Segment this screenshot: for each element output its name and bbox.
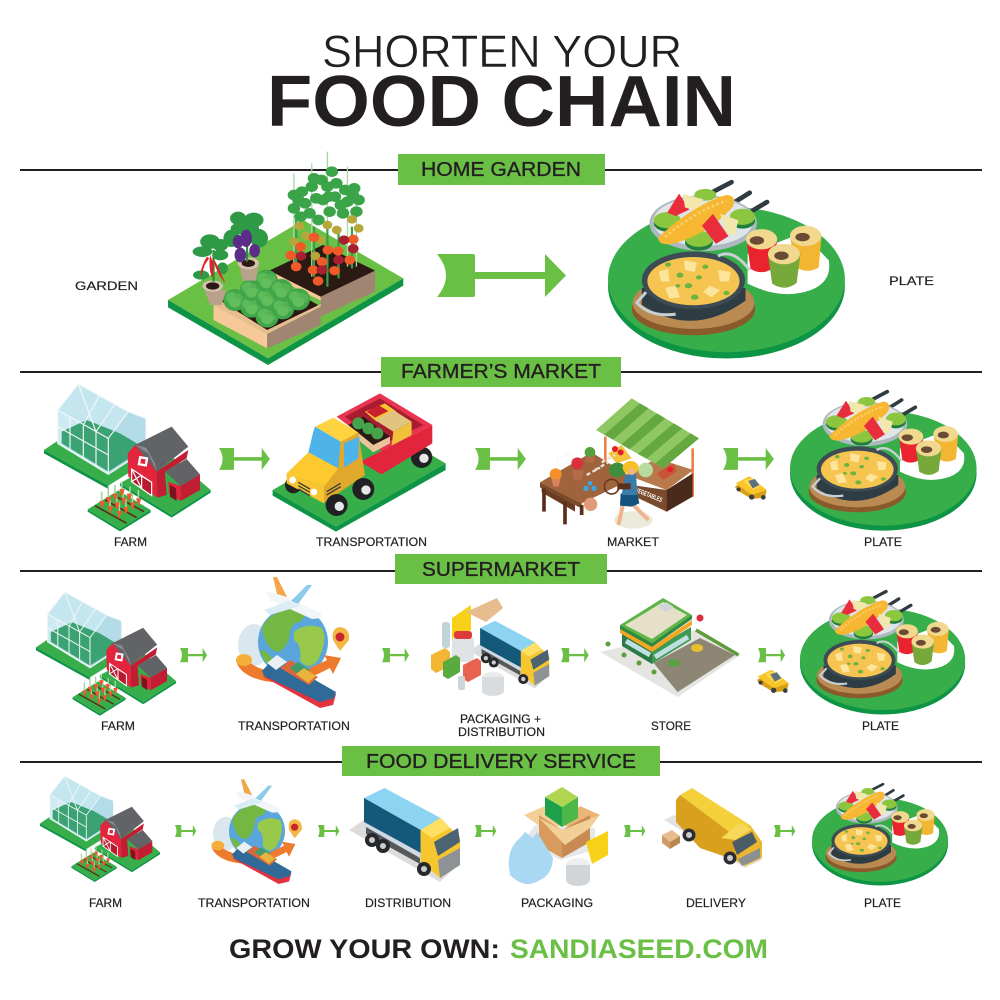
label: plate: PLATE [862,719,899,733]
icon: market stall [540,398,699,529]
icon: pickup truck [273,393,446,532]
icon: taxi [757,670,789,693]
panel: home garden [20,152,982,365]
label: farm: FARM [89,896,122,910]
icon: globe, plane and ship [211,779,302,884]
heading: food delivery service: FOOD DELIVERY SERVICE [366,751,636,773]
heading: farmer's market: FARMER’S MARKET [401,361,601,383]
icon: farm [36,592,176,716]
arrow [318,825,339,837]
title line 2: FOOD CHAIN [267,62,736,142]
label: distribution: DISTRIBUTION [365,896,451,910]
label: transportation: TRANSPORTATION [238,719,350,733]
icon: packaging [509,787,608,886]
arrow [180,648,207,662]
label: plate: PLATE [864,535,902,549]
label: transportation: TRANSPORTATION [198,896,310,910]
icon: distribution truck [349,788,461,882]
heading: supermarket: SUPERMARKET [422,559,580,581]
icon: garden beds [168,152,403,365]
arrow [219,448,270,470]
panel: food delivery service [20,746,982,910]
label: garden: GARDEN [75,279,138,293]
arrow [475,448,526,470]
icon: farm [40,776,160,882]
title line 1: SHORTEN YOUR [322,26,682,77]
footer link: SANDIASEED.COM [510,934,768,964]
label: packaging + distribution [458,712,545,739]
label: plate: PLATE [864,896,901,910]
panel: supermarket [20,554,982,739]
title [267,26,736,142]
label: market: MARKET [607,535,660,549]
arrow [561,648,589,662]
icon: taxi [735,477,767,500]
icon: plate [608,182,845,359]
icon: delivery van [662,788,762,868]
arrow [774,825,795,837]
arrow [175,825,196,837]
label: plate: PLATE [889,274,934,288]
arrow [723,448,774,470]
arrow [624,825,645,837]
panel: farmer's market [20,357,982,549]
arrow [758,648,785,662]
icon: farm [44,384,211,531]
label: packaging + distribution: PACKAGING + [460,712,541,726]
icon: plate [800,591,965,714]
label: packaging: PACKAGING [521,896,593,910]
icon: plate [790,392,977,531]
icon: store [600,598,740,697]
footer call to action [229,934,768,964]
footer text: GROW YOUR OWN: [229,934,500,964]
label: store: STORE [651,719,691,733]
icon: packaging and truck [431,598,550,696]
icon: globe, plane and ship [236,577,349,708]
label: farm: FARM [101,719,135,733]
arrow [382,648,409,662]
arrow: garden to plate [437,254,566,297]
arrow [475,825,496,837]
label: delivery: DELIVERY [686,896,746,910]
icon: plate [812,784,948,885]
label: packaging + distribution: DISTRIBUTION [458,725,545,739]
label: farm: FARM [114,535,147,549]
heading: home garden: HOME GARDEN [421,159,581,181]
label: transportation: TRANSPORTATION [316,535,427,549]
icon: market stall: VEGETABLES [634,487,663,504]
